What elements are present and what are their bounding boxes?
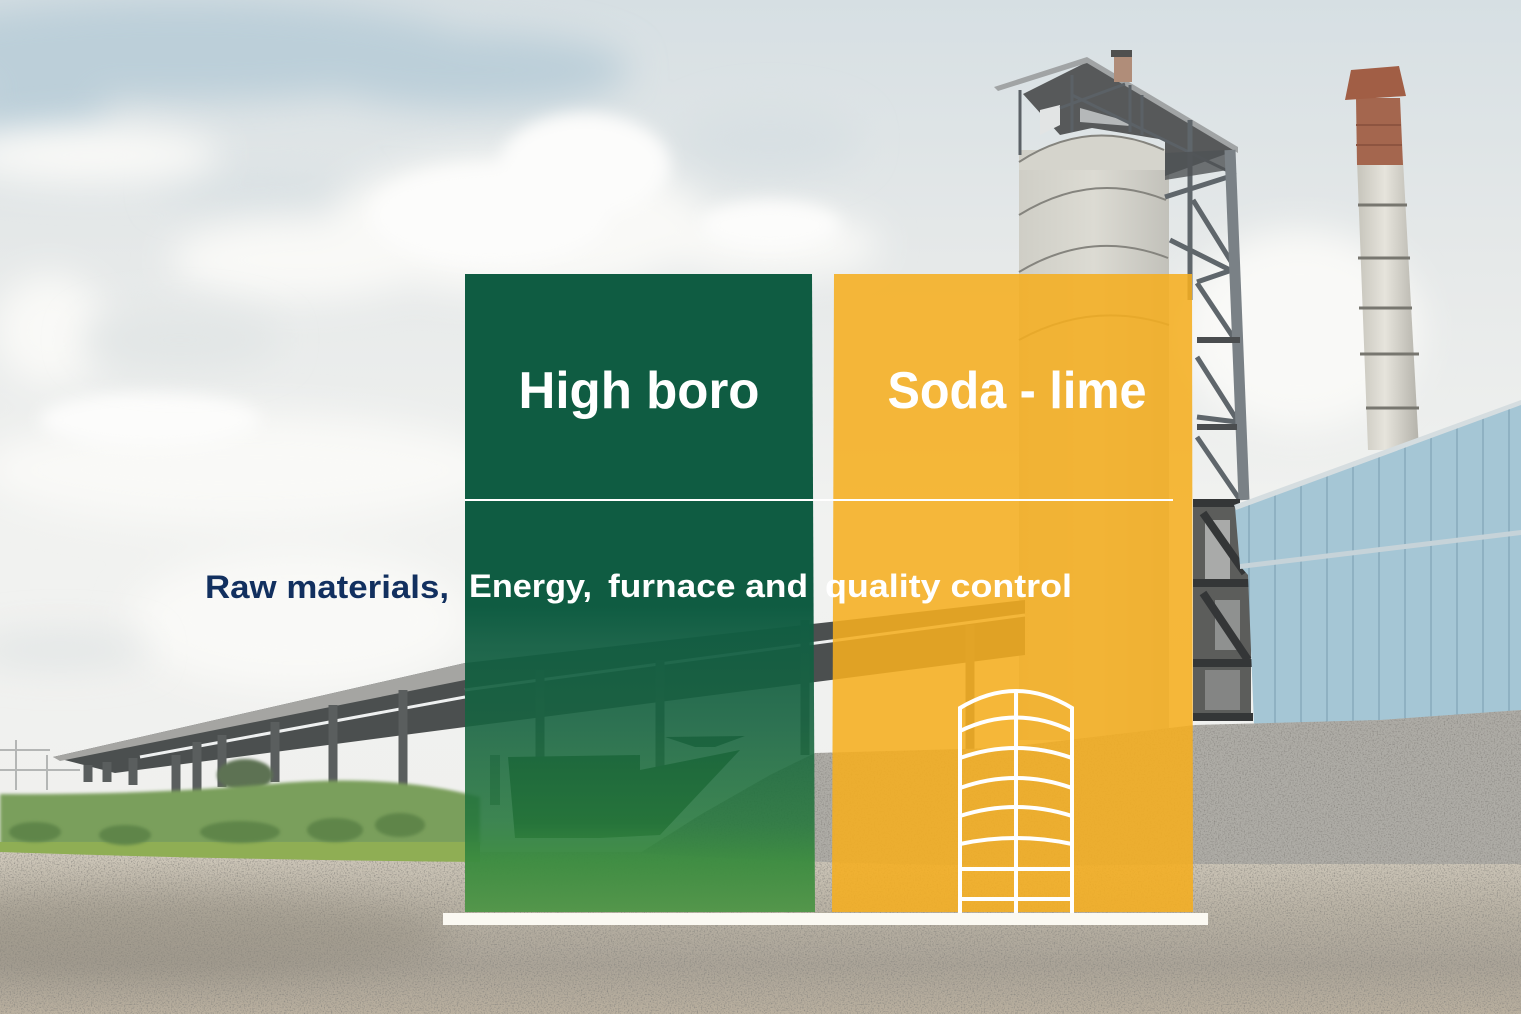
- icon: silo outline: [960, 691, 1072, 913]
- heading: High boro: High boro: [518, 362, 760, 420]
- text: raw materials, energy, furnace and quality control: Energy,: [469, 568, 592, 604]
- background: chimney: [1345, 66, 1419, 450]
- background: ground: [0, 852, 1521, 1014]
- background: conveyor structure: [0, 600, 1025, 800]
- background: ground shadow: [0, 890, 450, 980]
- text: raw materials, energy, furnace and quality control: furnace and: [608, 568, 808, 604]
- text: raw materials, energy, furnace and quality control: quality control: [825, 568, 1072, 604]
- heading: Soda - lime: Soda - lime: [888, 362, 1146, 420]
- panel: soda-lime amber: [832, 274, 1193, 912]
- background: silo tower: [994, 50, 1253, 740]
- background: blue warehouse: [1234, 400, 1521, 725]
- background: gravel pile: [640, 710, 1521, 866]
- panel: high boro green: [465, 274, 815, 912]
- divider line: [465, 499, 1173, 501]
- background: grass: [0, 781, 480, 862]
- text: raw materials, energy, furnace and quality control: Raw materials,: [205, 569, 449, 605]
- background: shrubs behind green panel: [490, 736, 745, 838]
- base bar: [443, 913, 1208, 925]
- text: raw materials, energy, furnace and quality control: [205, 568, 1072, 605]
- tower roof: [994, 57, 1238, 176]
- tower lattice: [1193, 340, 1253, 721]
